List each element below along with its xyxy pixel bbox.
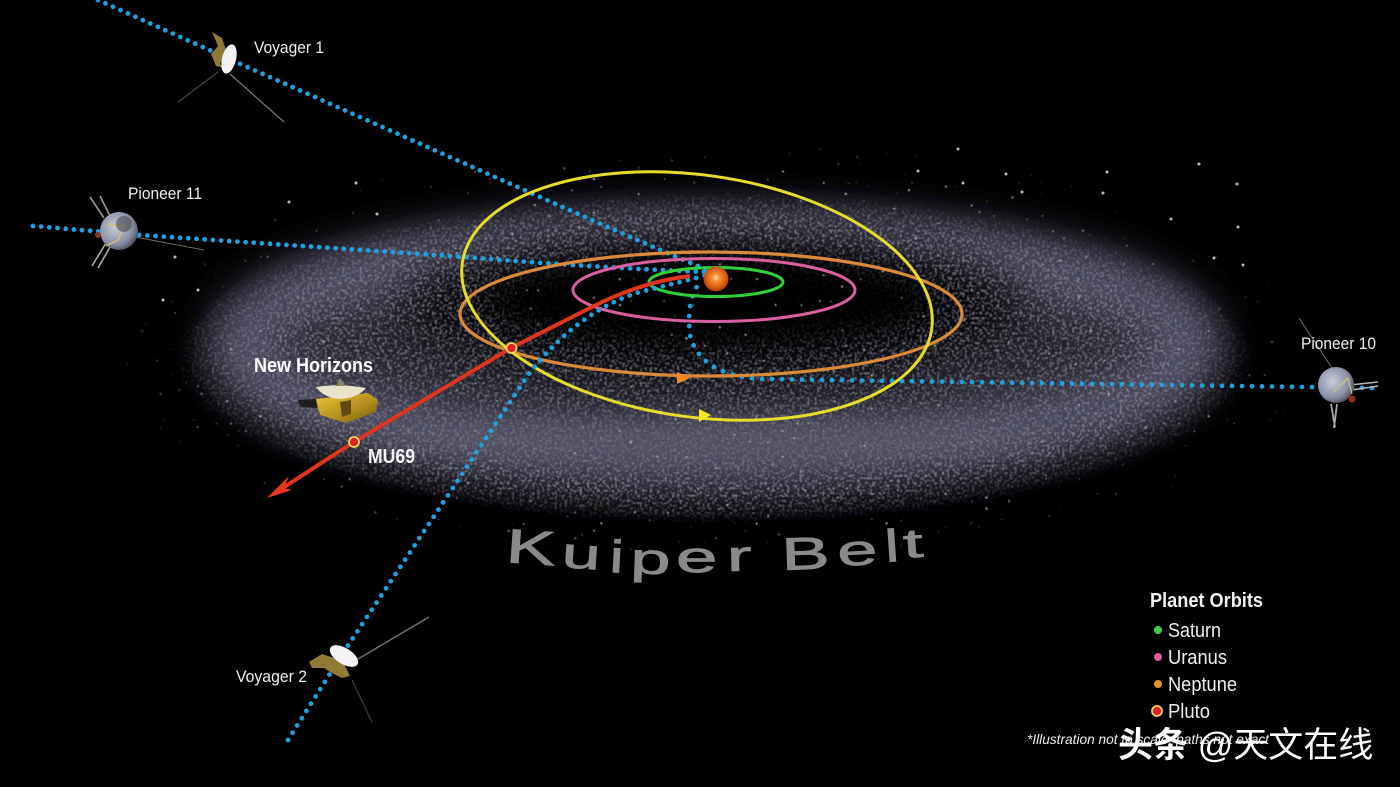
legend: planet orbits <box>1150 590 1263 723</box>
arrow: Pluto direction <box>699 409 711 422</box>
spacecraft: New Horizons <box>298 378 378 423</box>
label: Voyager 2: Voyager 2 <box>236 667 307 686</box>
spacecraft: Pioneer 11 <box>90 196 204 268</box>
title: Kuiper Belt: e <box>676 533 717 581</box>
label: Pioneer 10: Pioneer 10 <box>1301 334 1376 353</box>
marker: Pluto <box>506 343 516 353</box>
trajectory: Voyager 1 <box>98 0 712 272</box>
title: Kuiper Belt: B <box>781 527 830 580</box>
title: Kuiper Belt: l <box>883 520 901 572</box>
title: Kuiper Belt: t <box>901 520 925 567</box>
title: Kuiper Belt: e <box>836 525 878 575</box>
title: Kuiper Belt: r <box>726 532 752 580</box>
legend item: Neptune: Neptune <box>1168 674 1237 696</box>
legend item: Uranus: Uranus <box>1168 647 1227 669</box>
trajectory: Pioneer 10 <box>689 282 1372 388</box>
orbit: Pluto <box>445 143 949 449</box>
arrowhead <box>267 476 292 498</box>
sun <box>704 266 728 292</box>
orbit: Uranus <box>573 258 855 322</box>
title: Kuiper Belt: u <box>560 529 602 579</box>
spacecraft: Pioneer 10 <box>1299 318 1378 428</box>
arrow: Neptune direction <box>677 372 690 384</box>
trajectory: Voyager 2 <box>288 274 712 740</box>
label: Voyager 1: Voyager 1 <box>254 38 324 57</box>
trajectory: Pioneer 11 <box>33 226 706 272</box>
title: Kuiper Belt: i <box>608 531 625 583</box>
marker: MU69 <box>349 437 359 447</box>
Kuiper Belt debris disc <box>90 120 1340 590</box>
trajectory: New Horizons <box>267 276 690 498</box>
title: Kuiper Belt: p <box>630 534 671 584</box>
watermark: 头条 @天文在线 <box>1118 726 1373 765</box>
legend item: Pluto: Pluto <box>1168 701 1210 723</box>
orbit: Saturn <box>649 268 783 296</box>
footnote: *Illustration not to scale; paths not exact <box>1027 731 1270 747</box>
label: New Horizons: New Horizons <box>254 355 373 377</box>
label: MU69: MU69 <box>368 446 415 468</box>
title: Kuiper Belt: K <box>504 519 558 576</box>
orbit: Neptune <box>460 252 962 376</box>
legend item: Saturn: Saturn <box>1168 620 1221 642</box>
label: Pioneer 11: Pioneer 11 <box>128 184 202 203</box>
legend title: Planet Orbits <box>1150 590 1263 612</box>
title: Kuiper Belt <box>504 519 925 584</box>
spacecraft: Voyager 2 <box>309 617 429 722</box>
spacecraft: Voyager 1 <box>178 32 284 122</box>
